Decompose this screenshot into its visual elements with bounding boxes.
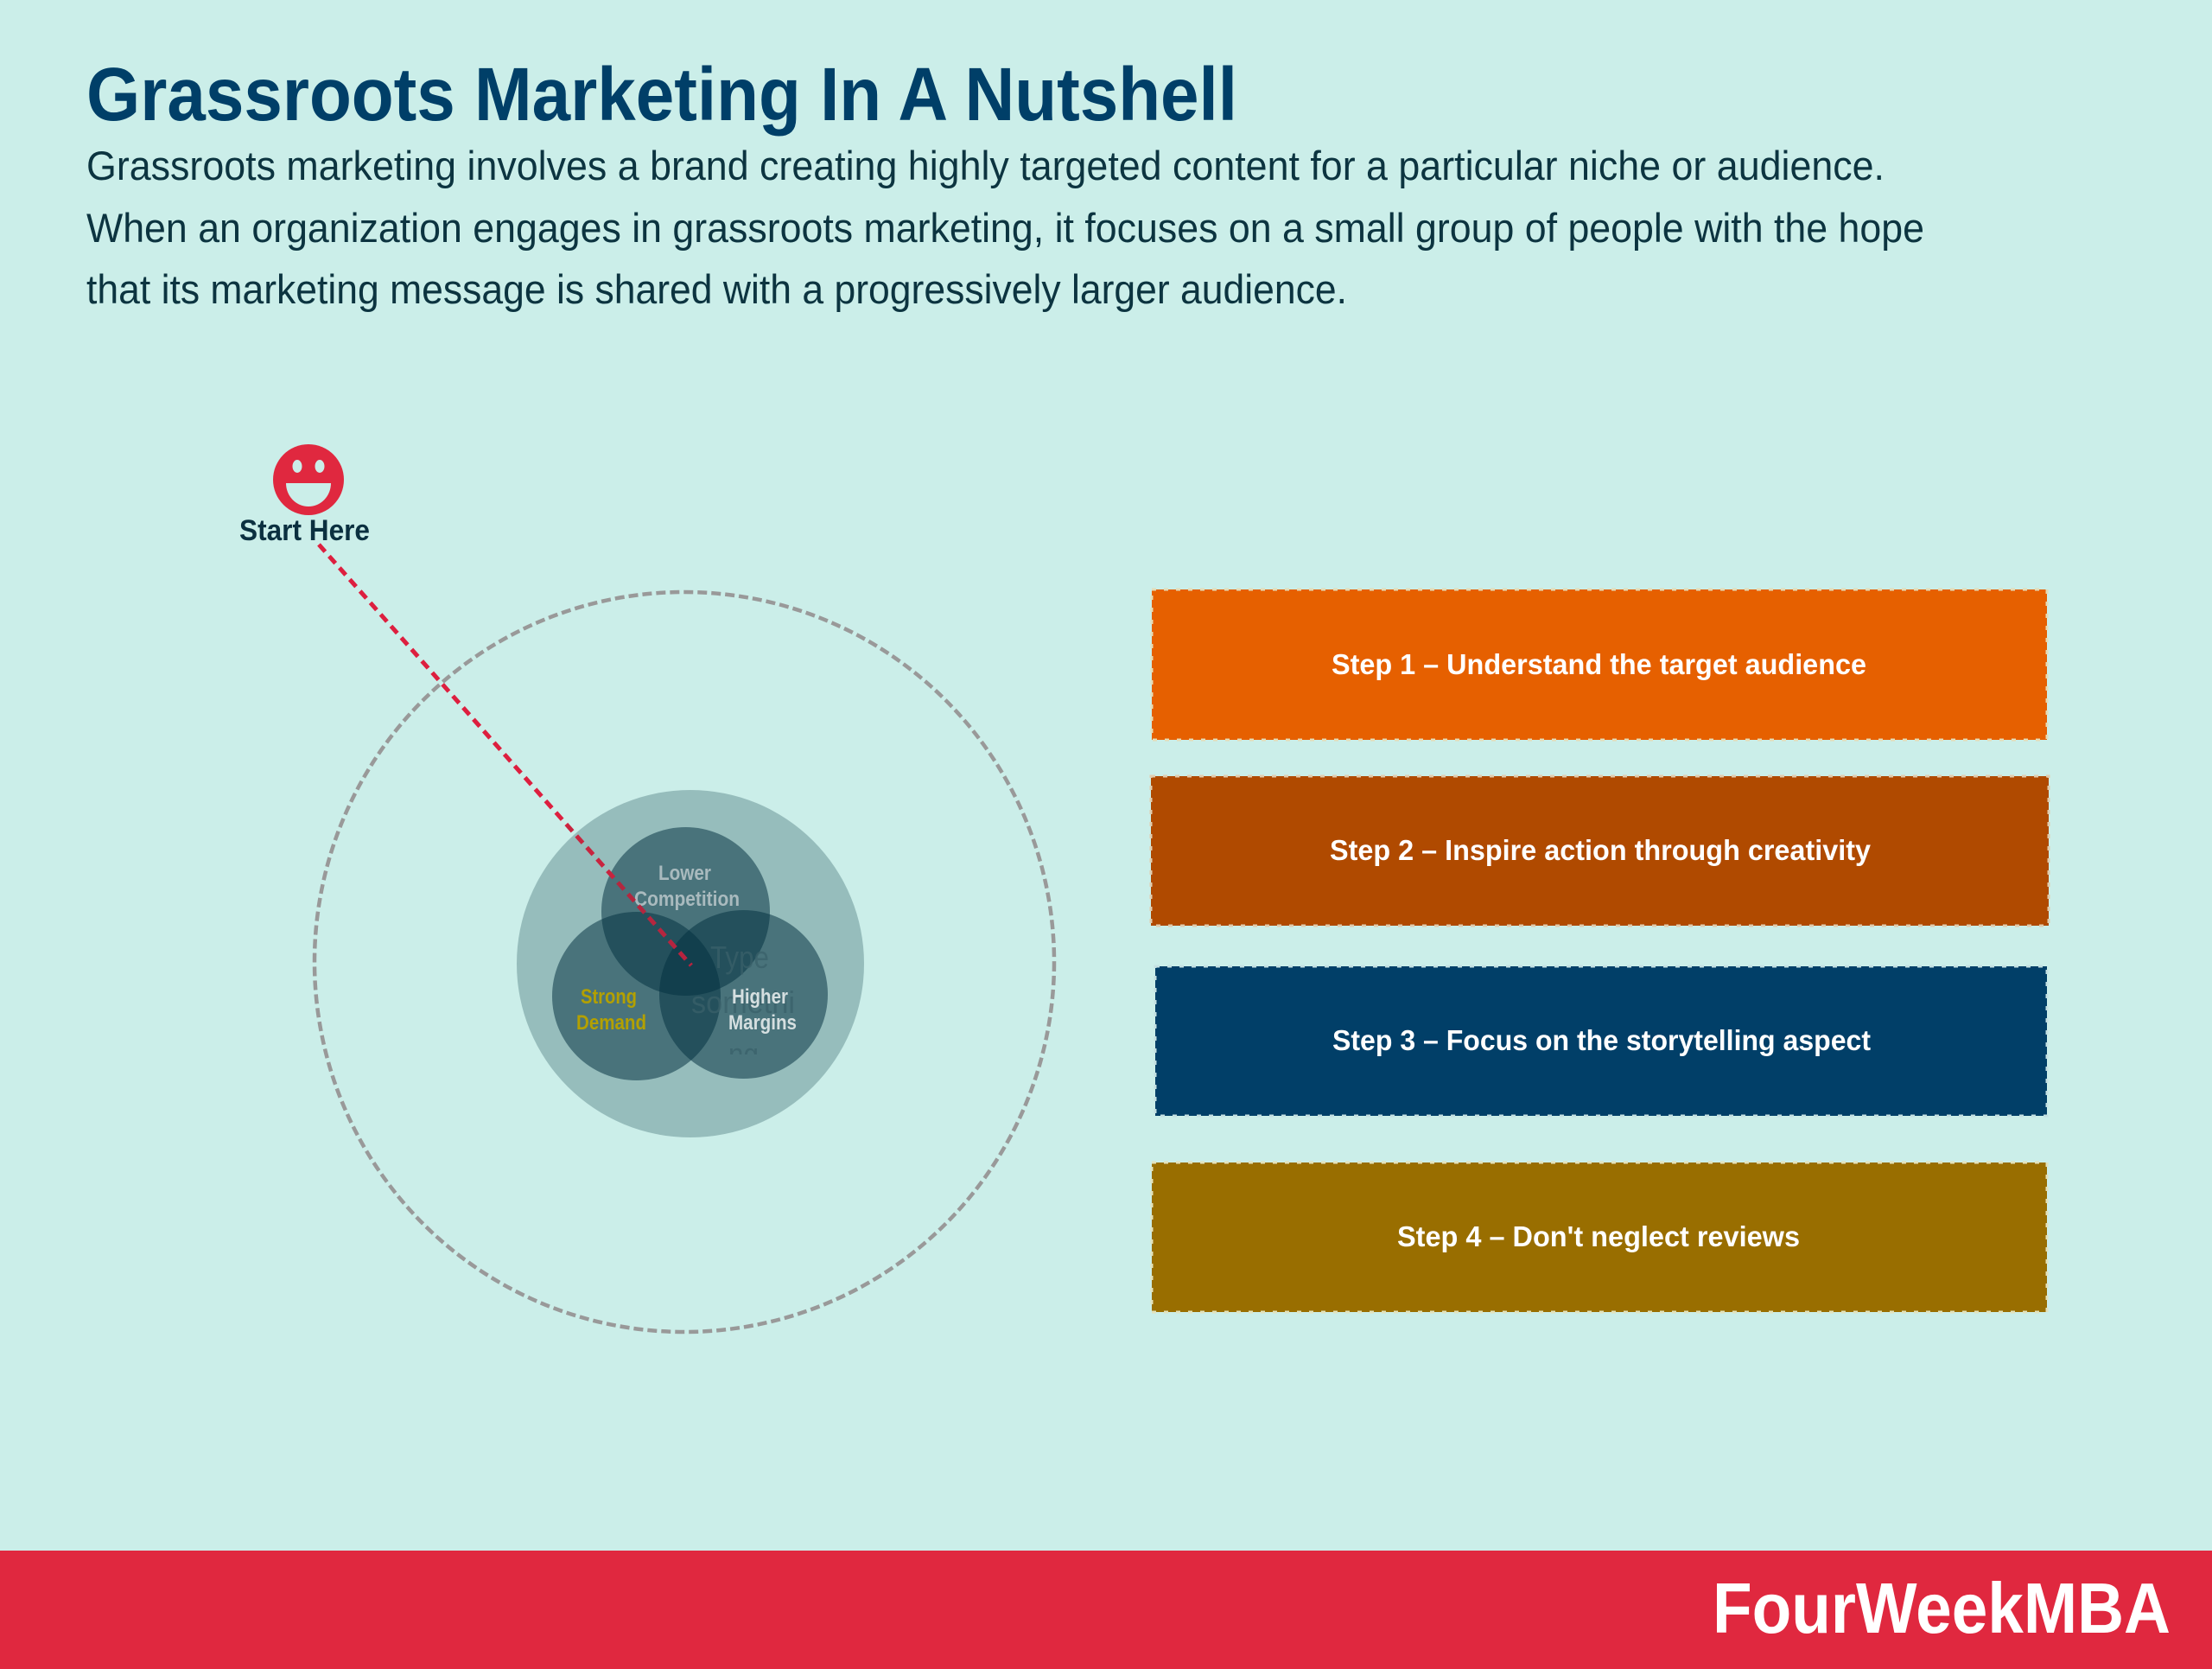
description text block: Grassroots marketing involves a brand creating highly targeted content for a particular niche or audience. <box>86 143 1885 188</box>
circle: strong demand <box>552 912 721 1080</box>
step 1 box <box>1152 589 2047 740</box>
description text block: that its marketing message is shared with a progressively larger audience. <box>86 266 1347 312</box>
footer brand: FourWeekMBA <box>1713 1568 2171 1648</box>
venn diagram <box>517 790 864 1137</box>
title: Grassroots Marketing In A Nutshell <box>86 53 1237 137</box>
faint placeholder text: Type <box>710 940 769 975</box>
step 4 box <box>1152 1163 2047 1312</box>
label: lower competition <box>634 862 740 911</box>
outer dashed circle <box>315 592 1054 1332</box>
step 2 box: Step 2 – Inspire action through creativity <box>1330 834 1872 866</box>
label: higher margins <box>728 985 797 1035</box>
icon: smiley face <box>273 444 344 515</box>
label: strong demand: Strong <box>581 985 637 1009</box>
faint placeholder text: ng <box>728 1036 759 1072</box>
arrow: dashed path from start to center <box>319 545 691 965</box>
description text block <box>86 143 1924 312</box>
circle: lower competition <box>601 827 770 996</box>
footer band <box>0 1551 2212 1669</box>
label: strong demand <box>576 985 646 1035</box>
start here label: Start Here <box>239 514 370 547</box>
label: lower competition: Competition <box>634 888 740 911</box>
description text block: When an organization engages in grassroots marketing, it focuses on a small group of people with the hope <box>86 205 1924 251</box>
faint placeholder text: somethi <box>691 984 795 1020</box>
label: lower competition: Lower <box>658 862 711 885</box>
label: higher margins: Margins <box>728 1011 797 1035</box>
step 4 box: Step 4 – Don't neglect reviews <box>1397 1220 1800 1252</box>
step 3 box: Step 3 – Focus on the storytelling aspect <box>1332 1024 1871 1056</box>
label: higher margins: Higher <box>732 985 788 1009</box>
step 2 box <box>1151 776 2049 926</box>
faint placeholder text <box>692 946 793 1054</box>
label: strong demand: Demand <box>576 1011 646 1035</box>
step 3 box <box>1155 966 2047 1116</box>
big background circle <box>517 790 864 1137</box>
step 1 box: Step 1 – Understand the target audience <box>1332 648 1866 680</box>
circle: higher margins <box>659 910 828 1079</box>
